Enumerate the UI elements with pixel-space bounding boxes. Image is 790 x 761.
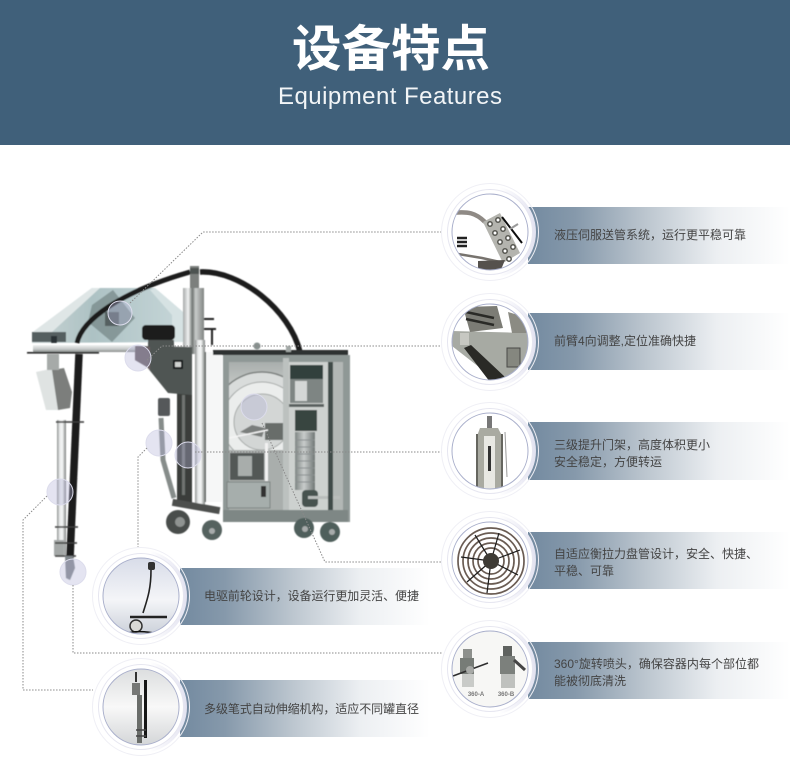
caption: 360°旋转喷头，确保容器内每个部位都 — [554, 656, 759, 671]
top knobs — [254, 342, 260, 350]
lower access panel — [227, 482, 270, 508]
thumbnail — [132, 672, 147, 743]
caption: 安全稳定，方便转运 — [554, 454, 662, 469]
band — [528, 642, 790, 699]
hose reel — [228, 370, 284, 482]
rear rails — [177, 393, 192, 505]
nozzle — [65, 556, 75, 580]
valve block — [142, 325, 175, 340]
small motor — [230, 453, 264, 480]
header banner — [0, 0, 790, 145]
caption — [554, 546, 758, 578]
hose — [77, 272, 190, 343]
band — [528, 207, 790, 264]
thumbnail ring — [442, 512, 538, 608]
cabinet — [213, 350, 348, 355]
glass hood — [32, 288, 183, 343]
panel: hydraulic servo hose feed — [442, 184, 790, 280]
caption: 液压伺服送管系统，运行更平稳可靠 — [554, 227, 746, 242]
caption: 能被彻底清洗 — [554, 673, 626, 688]
thumbnail: 360-B — [498, 692, 515, 698]
thumbnail ring — [442, 402, 538, 500]
band — [180, 680, 430, 737]
thumbnail — [458, 528, 524, 594]
caption — [554, 656, 759, 688]
lift column — [183, 288, 204, 354]
front drive handle — [158, 398, 170, 416]
hanger — [36, 368, 60, 410]
caption: 电驱前轮设计，设备运行更加灵活、便捷 — [204, 588, 419, 603]
pump — [290, 365, 323, 379]
band — [528, 422, 790, 480]
thumbnail — [129, 562, 167, 633]
thumbnail: 360-A — [468, 692, 485, 698]
thumbnail ring — [442, 620, 538, 718]
thumbnail — [477, 416, 507, 490]
caption: 自适应衡拉力盘管设计，安全、快捷、 — [554, 546, 758, 561]
base frame — [223, 510, 348, 522]
marker circles — [47, 301, 267, 585]
band — [528, 313, 790, 370]
telescopic rods — [57, 420, 66, 555]
band — [528, 532, 790, 589]
panel: electric front wheel — [92, 548, 430, 644]
title: 设备特点 — [292, 22, 490, 77]
control box — [135, 346, 192, 395]
dotted leader lines — [23, 232, 442, 690]
thumbnail — [452, 306, 528, 382]
thumbnail — [453, 646, 525, 698]
thumbnail ring — [92, 658, 190, 756]
arm — [33, 345, 135, 352]
illustration: cleaning machine — [27, 266, 350, 580]
rod clamps — [55, 422, 84, 556]
caption: 多级笔式自动伸缩机构，适应不同罐直径 — [204, 701, 419, 716]
thumbnail — [452, 212, 522, 272]
panel: telescopic mechanism — [92, 658, 430, 756]
caption: 三级提升门架，高度体积更小 — [554, 437, 710, 452]
panel: 360 rotating nozzle — [442, 620, 790, 718]
panel: self-adaptive reel — [442, 512, 790, 608]
caption: 前臂4向调整,定位准确快捷 — [554, 333, 696, 348]
panel: three-stage lifting mast — [442, 402, 790, 500]
caption: 平稳、可靠 — [554, 563, 614, 578]
panel: four-way forearm adjustment — [442, 294, 790, 390]
subtitle: Equipment Features — [278, 83, 502, 110]
band — [180, 568, 430, 625]
caption — [554, 437, 710, 469]
thumbnail ring — [442, 184, 538, 280]
thumbnail ring — [92, 548, 190, 644]
thumbnail ring — [442, 294, 538, 390]
wheels — [166, 510, 190, 534]
